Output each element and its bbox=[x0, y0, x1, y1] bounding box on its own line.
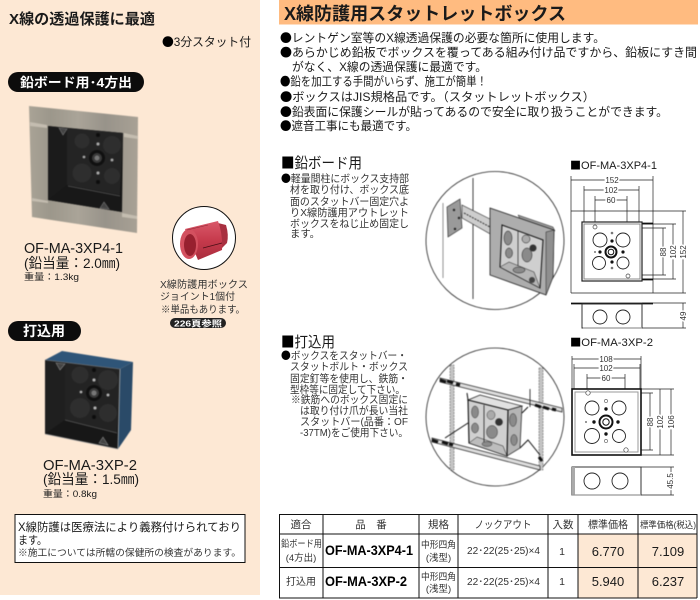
table: row OF-MA-3XP4-1: OF-MA-3XP4-1 bbox=[325, 542, 413, 558]
section: cast-in description: 型枠等に固定して下さい。 bbox=[290, 383, 405, 396]
section: cast-in description: スタットボルト・ボックス bbox=[290, 361, 408, 373]
badge: lead board: 鉛ボード用･4方出 bbox=[20, 75, 132, 90]
table: header row: 標準価格(税込) bbox=[640, 519, 696, 530]
label: model 3XP4-1: OF-MA-3XP4-1 bbox=[24, 240, 123, 257]
drawing: OF-MA-3XP4-1 dimensions: 49 bbox=[679, 311, 688, 320]
drawing: OF-MA-3XP-2 dimensions: 102 bbox=[599, 364, 613, 373]
drawing: OF-MA-3XP-2 dimensions bbox=[570, 334, 676, 495]
text block: feature bullets: ●鉛を加工する手間がいらず、施工が簡単！ bbox=[280, 72, 487, 90]
text: joint caption: ジョイント1個付 bbox=[160, 290, 235, 303]
table: header row: 標準価格 bbox=[588, 518, 628, 531]
text block: feature bullets: ●あらかじめ鉛板でボックスを覆ってある組み付け品ですから、鉛板にすき間 bbox=[280, 44, 697, 60]
section: lead board description: ●軽量間柱にボックス支持部 bbox=[281, 171, 409, 186]
table: row OF-MA-3XP-2: 22･22(25･25)×4 bbox=[467, 577, 540, 588]
label: model 3XP4-1 bbox=[24, 240, 123, 282]
section: lead board description bbox=[281, 152, 409, 240]
table: row OF-MA-3XP4-1: 鉛ボード用 bbox=[281, 538, 322, 550]
table: row OF-MA-3XP-2: 打込用 bbox=[286, 575, 316, 588]
drawing: OF-MA-3XP4-1 dimensions: 152 bbox=[679, 245, 688, 259]
table: row OF-MA-3XP-2: 6.237 bbox=[652, 574, 684, 589]
table: row OF-MA-3XP4-1: 1 bbox=[559, 546, 565, 558]
table: header row: 入数 bbox=[552, 518, 574, 531]
table: header row bbox=[290, 518, 696, 531]
section: cast-in description: は取り付け爪が長い当社 bbox=[300, 404, 408, 417]
label: model 3XP-2 bbox=[43, 457, 139, 499]
table: row OF-MA-3XP-2: OF-MA-3XP-2 bbox=[325, 573, 407, 589]
photo: lead board box bbox=[29, 106, 138, 233]
section: cast-in description: スタットバー(品番：OF bbox=[300, 416, 408, 428]
heading: main title bar: X線防護用スタットレットボックス bbox=[284, 4, 566, 24]
callout: legal note: ※施工については所轄の保健所の検査があります。 bbox=[18, 547, 241, 559]
section: cast-in description: ※鉄筋へのボックス固定に bbox=[291, 393, 408, 406]
text block: feature bullets bbox=[280, 29, 697, 134]
heading: main title bar bbox=[279, 0, 698, 24]
drawing: OF-MA-3XP4-1 dimensions: ■OF-MA-3XP4-1 bbox=[570, 157, 657, 173]
table: row OF-MA-3XP-2: 1 bbox=[559, 576, 565, 588]
label: model 3XP4-1: (鉛当量：2.0㎜) bbox=[24, 255, 120, 271]
text: joint caption: ※単品もあります。 bbox=[161, 303, 245, 316]
table: row OF-MA-3XP4-1: 中形四角 bbox=[421, 539, 456, 551]
photo: red box joint bbox=[172, 206, 236, 270]
text block: feature bullets: ●ボックスはJIS規格品です。（スタットレットボックス） bbox=[280, 88, 595, 105]
table: row OF-MA-3XP4-1: 6.770 bbox=[592, 544, 624, 559]
panel: left product column bbox=[0, 0, 260, 595]
text block: feature bullets: ●レントゲン室等のX線透過保護の必要な箇所に使用します。 bbox=[280, 29, 605, 46]
label: model 3XP-2: OF-MA-3XP-2 bbox=[43, 457, 137, 474]
table: row OF-MA-3XP-2: 5.940 bbox=[592, 574, 624, 589]
section: lead board description: ボックスをねじ止め固定し bbox=[290, 218, 409, 230]
section: lead board description: 面のスタットバー固定穴よ bbox=[290, 196, 409, 208]
text: stud note: ●3分スタット付 bbox=[162, 33, 251, 50]
label: model 3XP-2: (鉛当量：1.5㎜) bbox=[43, 471, 139, 487]
drawing: OF-MA-3XP4-1 dimensions bbox=[570, 157, 688, 328]
text block: feature bullets: ●遮音工事にも最適です。 bbox=[280, 117, 417, 134]
photo: cast-in box bbox=[45, 351, 133, 449]
table: row OF-MA-3XP-2 bbox=[286, 571, 684, 595]
callout: legal note: X線防護は医療法により義務付けられており bbox=[18, 520, 241, 534]
drawing: OF-MA-3XP4-1 dimensions: 152 bbox=[605, 176, 619, 185]
text: joint caption bbox=[160, 278, 248, 316]
section: cast-in description: ■打込用 bbox=[281, 331, 335, 352]
text: joint caption: X線防護用ボックス bbox=[160, 278, 248, 291]
drawing: OF-MA-3XP-2 dimensions: 88 bbox=[646, 417, 655, 426]
table: pricing bbox=[279, 514, 697, 598]
section: cast-in description: -37TM)をご使用下さい。 bbox=[300, 426, 408, 439]
badge: lead board bbox=[8, 72, 144, 92]
text block: feature bullets: ●鉛表面に保護シールが貼ってあるので安全に取り扱うことができます。 bbox=[280, 103, 668, 120]
table: row OF-MA-3XP4-1: 22･22(25･25)×4 bbox=[467, 546, 540, 557]
badge: cast-in bbox=[8, 321, 81, 341]
table: grid lines bbox=[279, 514, 697, 598]
table: row OF-MA-3XP4-1 bbox=[281, 538, 684, 564]
section: cast-in description: 固定釘等を使用し、鉄筋・ bbox=[290, 372, 408, 385]
section: cast-in description bbox=[281, 331, 408, 439]
section: lead board description: りX線防護用アウトレット bbox=[290, 206, 409, 219]
heading: left title: X線の透過保護に最適 bbox=[9, 10, 155, 28]
drawing: OF-MA-3XP-2 dimensions: 45.5 bbox=[666, 473, 675, 489]
badge: cast-in: 打込用 bbox=[23, 323, 65, 339]
drawing: OF-MA-3XP4-1 dimensions: 102 bbox=[604, 186, 618, 195]
section: cast-in description: ●ボックスをスタットバー・ bbox=[281, 348, 407, 363]
drawing: OF-MA-3XP-2 dimensions: 60 bbox=[602, 374, 611, 383]
drawing: OF-MA-3XP4-1 dimensions: 60 bbox=[607, 196, 616, 205]
table: header row: 適合 bbox=[290, 518, 312, 531]
table: header row: 規格 bbox=[428, 518, 449, 531]
section: lead board description: ます。 bbox=[290, 228, 320, 240]
drawing: OF-MA-3XP4-1 dimensions: 102 bbox=[669, 245, 678, 259]
drawing: OF-MA-3XP-2 dimensions: 102 bbox=[656, 415, 665, 429]
drawing: OF-MA-3XP-2 dimensions: ■OF-MA-3XP-2 bbox=[570, 334, 653, 350]
table: price cell background bbox=[578, 534, 697, 598]
drawing: OF-MA-3XP4-1 dimensions: 88 bbox=[659, 247, 668, 256]
text block: feature bullets: がなく、X線の透過保護に最適です。 bbox=[292, 59, 487, 74]
table: row OF-MA-3XP4-1: (浅型) bbox=[426, 552, 451, 564]
table: row OF-MA-3XP-2: (浅型) bbox=[426, 583, 451, 595]
section: lead board description: 材を取り付け、ボックス底 bbox=[290, 183, 409, 196]
label: model 3XP-2: 重量：0.8kg bbox=[43, 488, 97, 499]
section: lead board description: ■鉛ボード用 bbox=[281, 152, 362, 173]
badge: page reference bbox=[170, 318, 226, 328]
table: row OF-MA-3XP-2: 中形四角 bbox=[421, 571, 456, 583]
drawing: OF-MA-3XP-2 dimensions: 106 bbox=[667, 415, 676, 429]
drawing: OF-MA-3XP-2 dimensions: 108 bbox=[599, 355, 613, 364]
callout: legal note: ます。 bbox=[18, 534, 47, 547]
table: header row: ノックアウト bbox=[474, 519, 532, 531]
illustration: cast-in mounting bbox=[426, 348, 564, 486]
label: model 3XP4-1: 重量：1.3kg bbox=[24, 271, 79, 282]
callout: legal note bbox=[15, 514, 245, 562]
table: row OF-MA-3XP4-1: (4方出) bbox=[286, 552, 316, 564]
badge: page reference: 226頁参照 bbox=[174, 318, 223, 328]
illustration: lead board mounting bbox=[426, 172, 564, 310]
table: row OF-MA-3XP4-1: 7.109 bbox=[652, 544, 684, 559]
table: header row: 品 番 bbox=[355, 519, 387, 531]
